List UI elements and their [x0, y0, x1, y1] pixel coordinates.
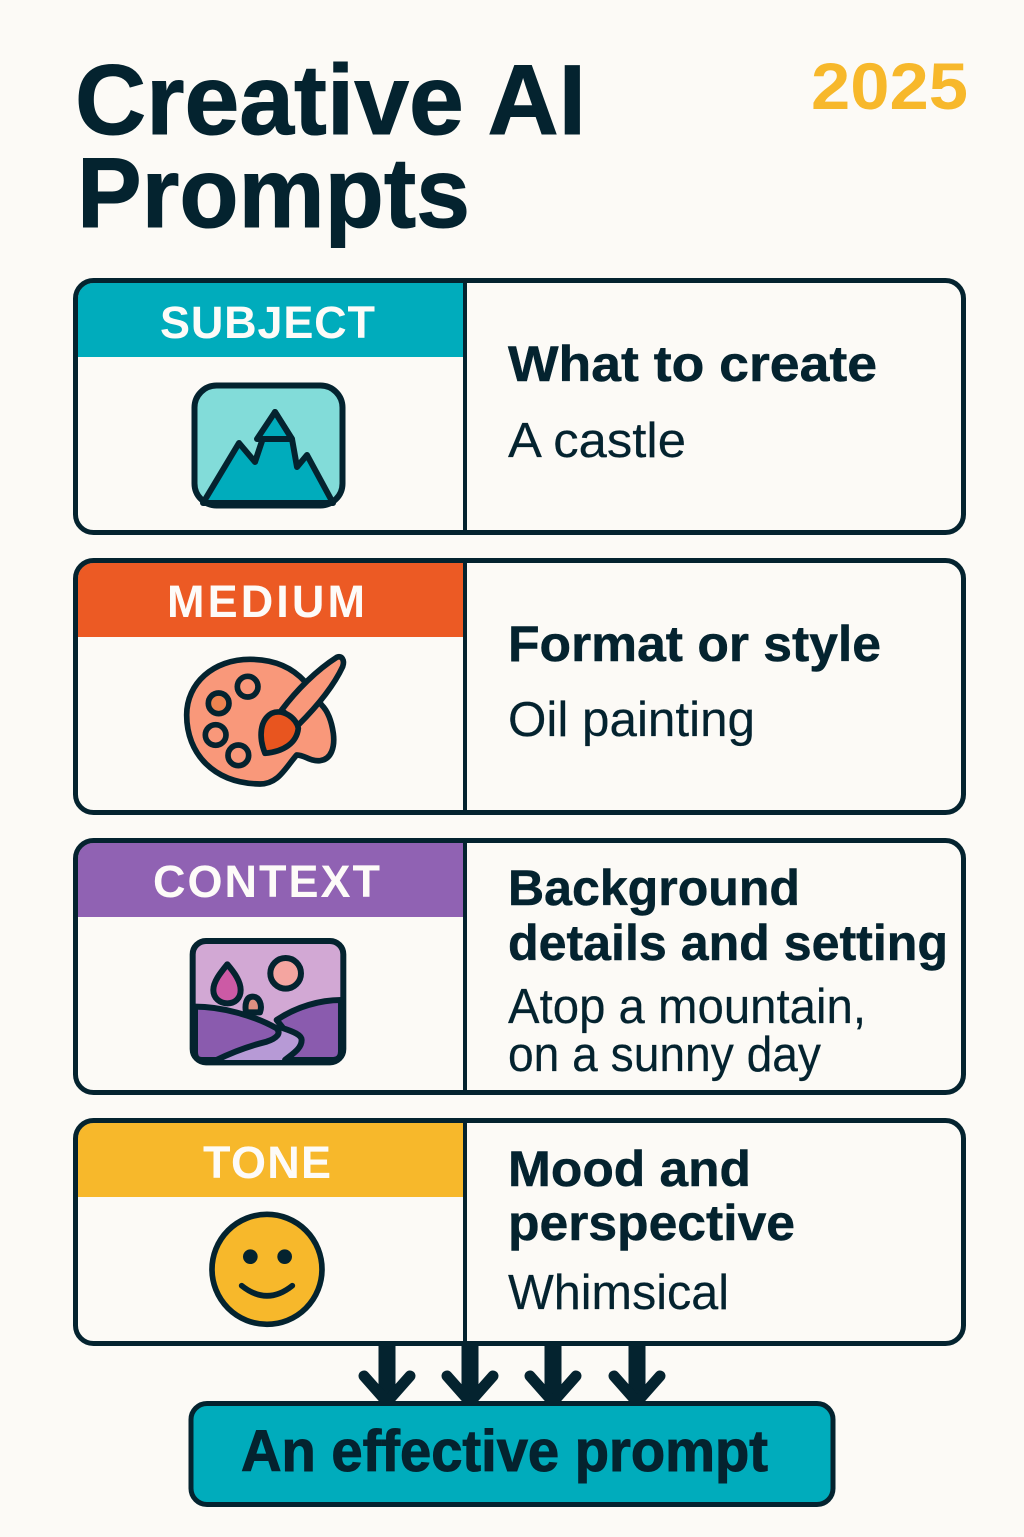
panel: context	[76, 840, 964, 1092]
text: an effective prompt: An effective prompt	[241, 1419, 768, 1484]
text: mood and perspective: Mood and	[508, 1141, 751, 1197]
label: subject: SUBJECT	[160, 297, 375, 348]
text: oil painting: Oil painting	[508, 693, 755, 747]
panel: tone	[76, 1120, 964, 1344]
text: atop a mountain: on a sunny day	[508, 1028, 821, 1082]
label: medium: MEDIUM	[167, 576, 365, 627]
text: format or style: Format or style	[508, 616, 881, 672]
label: tone: TONE	[203, 1137, 331, 1188]
text: whimsical: Whimsical	[508, 1266, 729, 1320]
text: atop a mountain: Atop a mountain,	[508, 980, 866, 1034]
arrows	[364, 1345, 660, 1402]
text: a castle: A castle	[508, 414, 686, 468]
panel: medium	[76, 560, 964, 812]
text: background details and setting: Background	[508, 860, 800, 916]
text: background details and setting	[508, 860, 948, 971]
icon: mountain	[194, 386, 342, 506]
text: mood and perspective	[508, 1141, 795, 1251]
title: Prompts	[77, 137, 470, 248]
icon: palette and brush	[187, 657, 343, 784]
text: what to create: What to create	[508, 336, 877, 392]
label: context: CONTEXT	[153, 856, 380, 907]
panel: subject	[76, 280, 964, 532]
result box	[191, 1404, 833, 1504]
title	[75, 44, 586, 248]
icon: smiley	[212, 1214, 322, 1324]
text: mood and perspective: perspective	[508, 1195, 795, 1251]
year: 2025	[811, 49, 968, 123]
title: Creative AI	[75, 44, 586, 155]
text: atop a mountain	[508, 980, 866, 1082]
text: background details and setting: details and setting	[508, 915, 948, 971]
icon: landscape	[193, 941, 343, 1062]
